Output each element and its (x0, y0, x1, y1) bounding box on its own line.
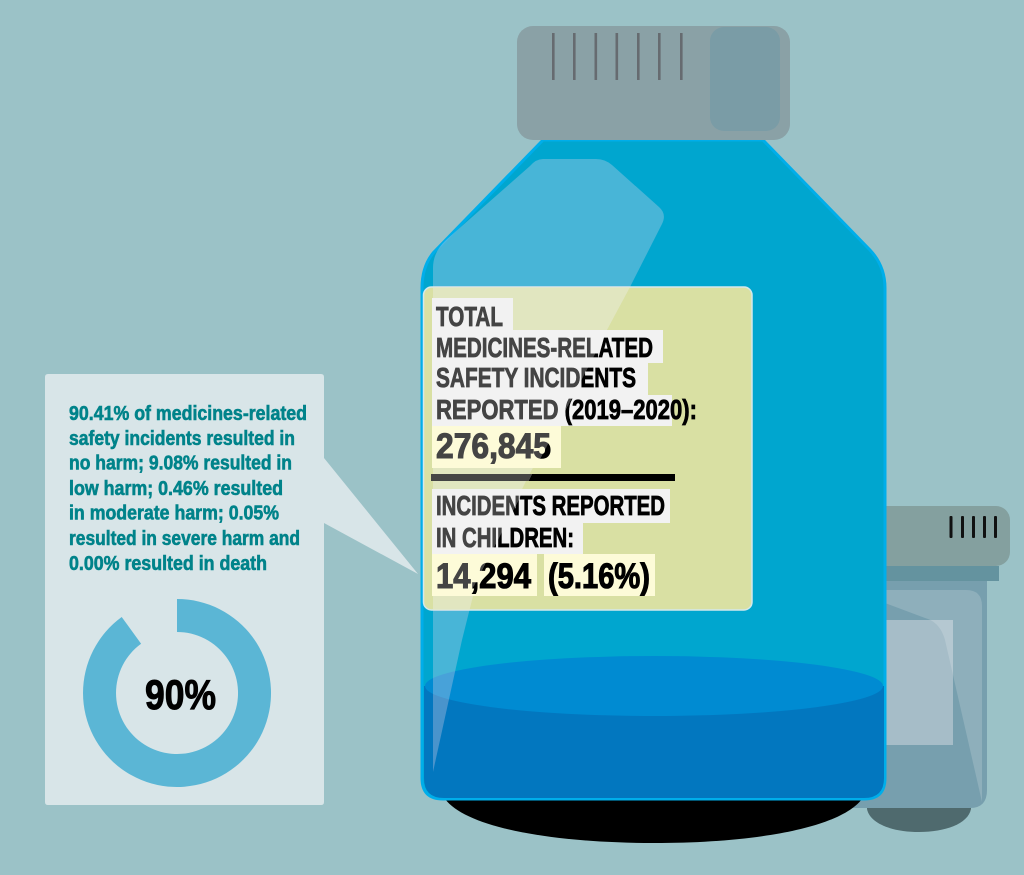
label text (431, 298, 697, 596)
liquid surface (425, 656, 883, 716)
big bottle base shadow (445, 799, 862, 843)
children percent: (5.16%) (548, 557, 650, 596)
small bottle foot (867, 805, 971, 832)
bottle glass highlight (433, 159, 664, 772)
heading: total incidents: SAFETY INCIDENTS (436, 362, 636, 393)
callout panel (45, 374, 418, 805)
big bottle (422, 26, 885, 799)
callout text: no harm; 9.08% resulted in (69, 452, 292, 474)
heading: children: INCIDENTS REPORTED (436, 490, 665, 521)
heading: children (436, 490, 665, 553)
callout text: resulted in severe harm and (69, 528, 300, 550)
small bottle glass highlight (860, 590, 982, 802)
small bottle cap (830, 506, 1010, 566)
highlight boxes (432, 298, 672, 554)
number highlight boxes (432, 426, 655, 596)
callout shape with pointer (45, 374, 418, 805)
callout text: 0.00% resulted in death (69, 553, 267, 575)
bottle cap (517, 26, 790, 140)
bottle cap side panel (710, 27, 780, 131)
bottle cap ticks (552, 33, 683, 80)
liquid body (424, 686, 884, 798)
heading: total incidents: TOTAL (436, 301, 503, 332)
label panel (424, 287, 752, 610)
callout text (69, 403, 307, 575)
callout text: safety incidents resulted in (69, 428, 295, 450)
heading: total incidents (436, 301, 697, 425)
rule (431, 474, 675, 481)
heading: total incidents: MEDICINES-RELATED (436, 332, 653, 363)
callout text: 90.41% of medicines-related (69, 403, 307, 425)
donut value: 90% (145, 671, 216, 718)
callout text: in moderate harm; 0.05% (69, 502, 279, 524)
total number: 276,845 (436, 427, 551, 466)
bottle glass (422, 140, 885, 799)
heading: total incidents: REPORTED (2019–2020): (436, 394, 697, 425)
donut chart: 90% (83, 599, 271, 787)
small bottle cap ticks (950, 516, 997, 538)
small bottle (830, 506, 1010, 832)
children number: 14,294 (436, 557, 531, 596)
heading: children: IN CHILDREN: (436, 522, 574, 553)
small bottle label (860, 620, 953, 745)
small bottle body (850, 581, 987, 808)
callout text: low harm; 0.46% resulted (69, 478, 283, 500)
small bottle collar (840, 566, 999, 581)
